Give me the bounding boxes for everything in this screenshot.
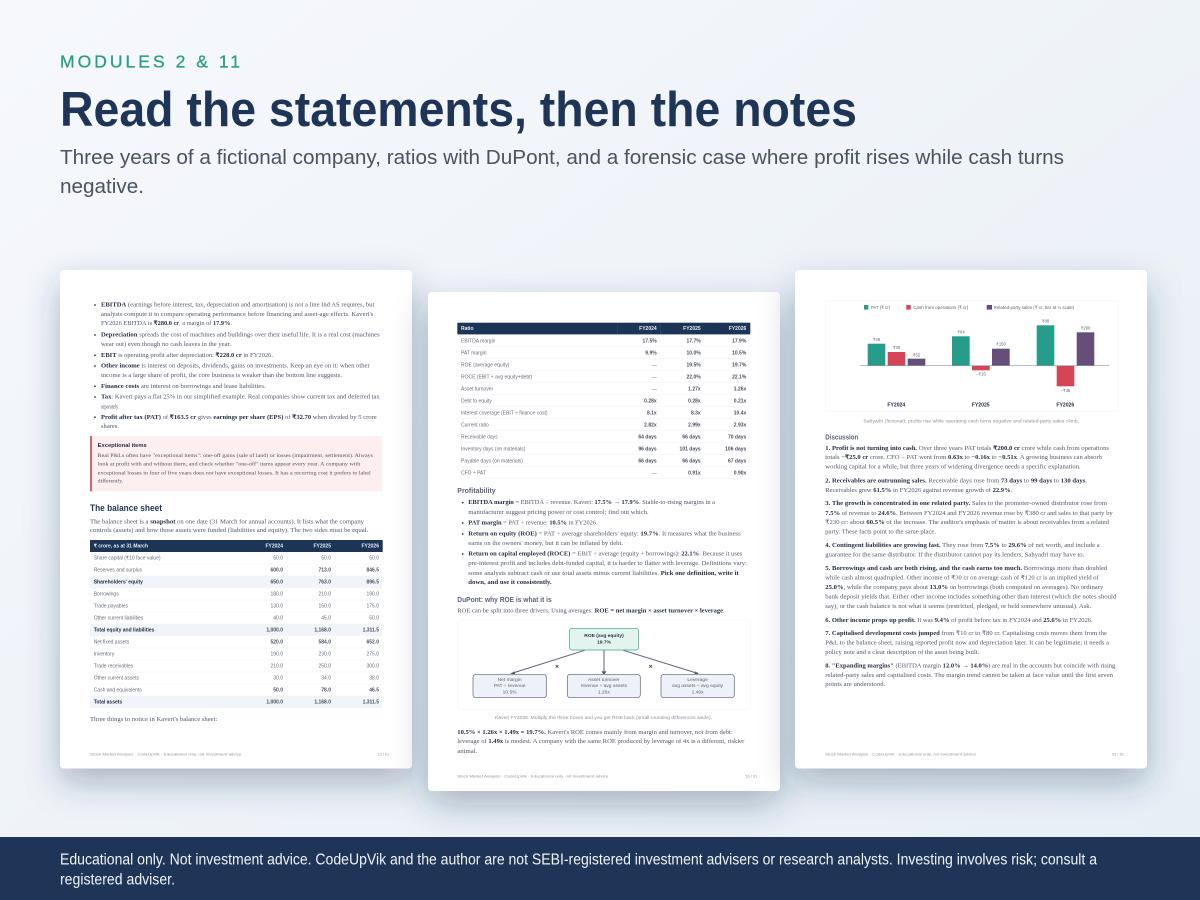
table: balance sheet: 1,168.0 xyxy=(314,700,331,706)
bullet list: P&L terms: FY2026 EBITDA is ₹280.0 cr, a margin of 17.9%. xyxy=(101,320,232,327)
table: balance sheet: Inventory xyxy=(94,652,115,658)
text: discussion points: 5. Borrowings and cash are both rising, and the cash earns too much. Borrowings more than doubled xyxy=(825,566,1107,572)
table: balance sheet: 300.0 xyxy=(366,664,379,670)
bullet list: P&L terms: Other income is interest on deposits, dividends, gains on investments. Keep an eye on it: when other xyxy=(101,364,370,370)
text: balance sheet intro: The balance sheet is a snapshot on one date (31 March for annual accounts). It lists what the company xyxy=(90,518,365,526)
page footer xyxy=(90,751,389,756)
table: balance sheet: 846.5 xyxy=(366,568,379,574)
diagram: DuPont tree xyxy=(458,620,751,709)
title: Read the statements, then the notes xyxy=(60,83,857,137)
table: ratios: 0.91x xyxy=(688,470,701,476)
bullet list: P&L terms: shares. xyxy=(101,424,119,430)
legend: Cash from operations (₹ cr) xyxy=(913,305,969,310)
year labels xyxy=(887,402,1074,408)
text: discussion points: bank deposit yields that. Either other income includes something other than interest (which the notes should xyxy=(825,594,1116,600)
table: balance sheet: 34.0 xyxy=(321,676,331,682)
panel: page 16, ratios and DuPont xyxy=(428,292,780,791)
table: balance sheet: 30.0 xyxy=(273,676,283,682)
table: ratios: 96 days xyxy=(638,446,657,452)
table: balance sheet: 230.0 xyxy=(318,652,331,658)
text: discussion points: 7. Capitalised development costs jumped from ₹10 cr to ₹80 cr. Capitalising costs moves them from the xyxy=(825,630,1107,637)
node: ROE: ROE (avg equity) xyxy=(584,633,624,639)
text: balance sheet intro: controls (assets) and how those assets were funded (liabilities and equity). The two sides must be equal. xyxy=(90,527,369,534)
bar value labels: ₹150 xyxy=(996,342,1006,347)
text: discussion points: 8. "Expanding margins" (EBITDA margin 12.0% → 14.0% ) are real in the accounts but coincide with rising xyxy=(825,662,1115,670)
bullet list: P&L terms: EBIT is operating profit after depreciation: ₹228.0 cr in FY2026. xyxy=(101,352,273,359)
bullet list: P&L terms: EBITDA (earnings before interest, tax, depreciation and amortisation) is not a line Ind AS requires, but xyxy=(101,302,375,308)
text: discussion points: party. These facts point to the same place. xyxy=(825,528,937,536)
table: balance sheet: 1,000.0 xyxy=(266,700,283,706)
table: balance sheet: 190.0 xyxy=(366,592,379,598)
table: balance sheet: FY2024 xyxy=(265,544,283,550)
node: net margin: Net margin xyxy=(498,677,522,683)
table: balance sheet: 713.0 xyxy=(318,568,331,574)
subtitle: Three years of a fictional company, ratios with DuPont, and a forensic case where profit rises while cash turns xyxy=(60,146,1064,169)
node: net margin xyxy=(473,674,546,698)
table: balance sheet: Trade receivables xyxy=(94,664,134,670)
table: ratios: 2.82x xyxy=(644,422,657,428)
table: ratios: Ratio xyxy=(461,326,474,332)
table: balance sheet: 190.0 xyxy=(270,652,283,658)
table: ratios: 0.90x xyxy=(734,470,747,476)
table: ratios: Asset turnover xyxy=(461,386,494,392)
table: balance sheet: 210.0 xyxy=(318,592,331,598)
table: ratios: ROCE (EBIT ÷ avg equity+debt) xyxy=(461,374,532,380)
table: ratios: 66 days xyxy=(682,434,701,440)
table: balance sheet: 650.0 xyxy=(270,580,283,586)
panel: page 53, forensic case xyxy=(795,270,1147,768)
table: balance sheet: 250.0 xyxy=(318,664,331,670)
table: ratios xyxy=(457,323,750,479)
caption: chart: Sahyadri (fictional): profits rise while operating cash turns negative and related-party sales climb. xyxy=(863,419,1079,424)
bullet list: P&L terms: wear out) even though no cash leaves in the year. xyxy=(101,341,232,348)
table: ratios: 10.4x xyxy=(734,410,747,416)
bars xyxy=(868,325,1094,386)
bullet list: P&L terms xyxy=(94,302,380,430)
table: balance sheet: Trade payables xyxy=(94,604,128,610)
table: ratios: Debt to equity xyxy=(461,398,492,404)
table: balance sheet: Reserves and surplus xyxy=(94,568,143,574)
table: balance sheet: 1,311.5 xyxy=(363,628,379,634)
text: DuPont worked example: animal. xyxy=(457,749,478,755)
year labels: FY2024 xyxy=(887,402,905,408)
text: discussion points: Receivables grew 61.5% in FY2026 against revenue growth of 22.9%. xyxy=(825,487,1013,494)
bullet list: profitability ratios: earns on the owners' money, but it can be inflated by debt. xyxy=(468,540,624,547)
year labels: FY2026 xyxy=(1056,402,1074,408)
text: discussion points: P&L to the balance sheet, raising reported profit now and depreciation later. It can be legitimate; it needs a xyxy=(825,640,1109,646)
table: ratios: 0.28x xyxy=(688,398,701,404)
callout: exceptional items: Real P&Ls often have "exceptional items": one-off gains (sale of land) or losses (impairment, settlement). Always xyxy=(98,452,373,459)
text: discussion points: 1. Profit is not turning into cash. Over three years PAT totals ₹200.0 cr crore while cash from operations xyxy=(825,445,1110,452)
text: discussion points: policy note and a clear description of the asset being built. xyxy=(825,649,980,656)
legend xyxy=(864,305,1075,310)
text: discussion points: 2. Receivables are outrunning sales. Receivable days rose from 73 days to 99 days to 130 days . xyxy=(825,478,1088,484)
node: asset turnover xyxy=(567,674,640,698)
table: ratios: 17.5% xyxy=(643,338,657,344)
text: discussion points xyxy=(825,445,1116,688)
heading: discussion: Discussion xyxy=(825,434,858,442)
page footer xyxy=(825,751,1124,756)
table: balance sheet: FY2026 xyxy=(361,544,379,550)
table: balance sheet: Total equity and liabilities xyxy=(94,628,155,634)
table: ratios: Receivable days xyxy=(461,434,498,440)
bullet list: P&L terms: analysts compute it to compare operating performance before financing and asset-age effects. Kaveri's xyxy=(101,311,374,318)
table: balance sheet: 50.0 xyxy=(321,556,331,562)
table: ratios: 2.93x xyxy=(734,422,747,428)
eyebrow: modules: MODULES 2 & 11 xyxy=(60,52,240,72)
table: balance sheet: 38.0 xyxy=(369,676,379,682)
table: balance sheet: 50.0 xyxy=(369,616,379,622)
table: ratios: Payable days (on materials) xyxy=(461,458,523,464)
bullet list: profitability ratios: EBITDA margin = EBITDA ÷ revenue. Kaveri: 17.5% → 17.9% . Stable-to-rising margins in a xyxy=(468,500,715,506)
text: discussion points: while cash almost quadrupled. Other income of ₹30 cr on average cash of ₹120 cr is an implied yield of xyxy=(825,574,1100,582)
bullet list: profitability ratios xyxy=(462,500,747,586)
table: balance sheet: 150.0 xyxy=(318,604,331,610)
table: ratios: 8.3x xyxy=(691,410,701,416)
node: leverage: avg assets ÷ avg equity xyxy=(672,683,724,689)
table: ratios: 101 days xyxy=(680,446,701,452)
text: discussion points: totals −₹25.0 cr crore. CFO ÷ PAT went from 0.63x to −0.16x to −0.51x. A growing business can absorb xyxy=(825,454,1102,461)
table: balance sheet: FY2025 xyxy=(313,544,331,550)
page footer: Stock Market Analysis · CodeUpVik · Educational only, not investment advice xyxy=(90,751,241,756)
table: balance sheet: 1,311.5 xyxy=(363,700,379,706)
footer band: disclaimer: Educational only. Not investment advice. CodeUpVik and the author are not SEBI-registered investment advisers or research analysts. Investing involves risk; consult a xyxy=(60,852,1097,868)
node: asset turnover: 1.26x xyxy=(598,689,610,695)
table: balance sheet: 600.0 xyxy=(270,568,283,574)
table: ratios: 19.5% xyxy=(687,362,701,368)
text: discussion points: points are understood. xyxy=(825,682,886,688)
bullet list: profitability ratios: manufacturer suggest pricing power or cost control; find out which. xyxy=(468,509,649,516)
table: ratios: Current ratio xyxy=(461,422,489,428)
table: ratios: 22.1% xyxy=(732,374,747,380)
bullet list: profitability ratios: Return on equity (ROE) = PAT ÷ average shareholders' equity: 19.7%. It measures what the business xyxy=(468,530,741,538)
table: ratios: 17.7% xyxy=(687,338,701,344)
table: ratios: 0.21x xyxy=(734,398,747,404)
subtitle: negative. xyxy=(60,175,144,198)
caption: DuPont: Kaveri FY2026. Multiply the three boxes and you get ROE back (small rounding differences aside). xyxy=(495,715,712,720)
subtitle xyxy=(60,146,1064,198)
text: discussion points: guarantee for the same distributor. If the distributor cannot pay its lenders, Sahyadri may have to. xyxy=(825,552,1085,558)
table: ratios: FY2026 xyxy=(729,326,747,332)
node: net margin: PAT ÷ revenue xyxy=(494,683,526,689)
table: ratios: 66 days xyxy=(682,458,701,464)
text: discussion points: 3. The growth is concentrated in one related party. Sales to the promoter-owned distributor rose from xyxy=(825,500,1107,507)
page footer: Stock Market Analysis · CodeUpVik · Educational only, not investment advice xyxy=(825,751,976,756)
page footer: 53 / 61 xyxy=(1112,751,1124,756)
table: balance sheet: 46.5 xyxy=(369,688,379,694)
heading: profitability: Profitability xyxy=(457,488,496,495)
bullet list: P&L terms: Profit after tax (PAT) of ₹163.5 cr gives earnings per share (EPS) of ₹32.70 when divided by 5 crore xyxy=(101,414,377,421)
text: three things: Three things to notice in Kaveri's balance sheet: xyxy=(90,717,218,723)
bar value labels: ₹48 xyxy=(873,337,881,342)
table: ratios: — xyxy=(652,386,657,392)
table: ratios: — xyxy=(652,470,657,476)
table: ratios: 1.26x xyxy=(734,386,747,392)
table: ratios: 17.9% xyxy=(732,338,747,344)
text: discussion points: 25.0% , while the company pays about 13.0% on borrowings (both computed on averages). No ordinary xyxy=(825,584,1104,591)
table: balance sheet: 175.0 xyxy=(366,604,379,610)
table: ratios: 2.99x xyxy=(688,422,701,428)
table: balance sheet: 78.0 xyxy=(321,688,331,694)
text: discussion points: 6. Other income props up profit. It was 9.4% of profit before tax in FY2024 and 25.6% in FY2026. xyxy=(825,617,1093,624)
table: ratios: EBITDA margin xyxy=(461,338,496,344)
arrows xyxy=(511,650,698,674)
node: asset turnover: Asset turnover xyxy=(588,677,620,683)
text: discussion points: 7.5% of revenue to 24.6%. Between FY2024 and FY2026 revenue rose by ₹380 cr and sales to that party by xyxy=(825,510,1114,517)
table: balance sheet: 763.0 xyxy=(318,580,331,586)
bullet list: profitability ratios: some analysts subtract cash or use total assets minus current liabilities. Pick one definition, write it xyxy=(468,571,739,577)
bar value labels: ₹88 xyxy=(1042,318,1050,323)
table: ratios: 19.7% xyxy=(732,362,747,368)
node: leverage: Leverage xyxy=(687,677,708,683)
table: ratios: 70 days xyxy=(728,434,747,440)
callout: exceptional items: Exceptional items xyxy=(98,443,147,449)
text: balance sheet intro xyxy=(90,518,369,534)
table: balance sheet xyxy=(90,540,383,708)
text: DuPont worked example xyxy=(457,729,744,755)
table: ratios: 66 days xyxy=(638,458,657,464)
text: DuPont intro: ROE can be split into three drivers. Using averages: ROE = net margin × asset turnover × leverage . xyxy=(457,608,725,614)
table: ratios: FY2024 xyxy=(639,326,657,332)
page footer: 13 / 61 xyxy=(377,751,389,756)
table: balance sheet: Total assets xyxy=(94,700,122,706)
table: ratios: — xyxy=(652,362,657,368)
node: leverage: 1.49x xyxy=(692,689,704,695)
bullet list: P&L terms: income is a large share of profit, the core business is weaker than the bottom line suggests. xyxy=(101,372,343,379)
table: ratios: 1.27x xyxy=(688,386,701,392)
table: balance sheet: Share capital (₹10 face value) xyxy=(94,556,161,562)
table: balance sheet: Borrowings xyxy=(94,592,119,598)
node: leverage xyxy=(661,674,734,698)
table: ratios: 8.1x xyxy=(647,410,657,416)
bar value labels: ₹290 xyxy=(1081,326,1091,331)
table: balance sheet: 275.0 xyxy=(366,652,379,658)
table: balance sheet: 896.5 xyxy=(366,580,379,586)
bar value labels: −₹10 xyxy=(976,372,987,377)
footer band: disclaimer xyxy=(0,837,1200,900)
table: balance sheet: 520.0 xyxy=(270,640,283,646)
chart: PAT, cash from operations and related-party sales xyxy=(826,301,1118,412)
table: ratios: 106 days xyxy=(725,446,747,452)
page footer: 16 / 61 xyxy=(745,774,757,779)
table: ratios: 0.28x xyxy=(644,398,657,404)
table: balance sheet: 50.0 xyxy=(369,556,379,562)
node: asset turnover: revenue ÷ avg assets xyxy=(581,683,628,689)
table: ratios: 10.5% xyxy=(732,350,747,356)
table: ratios: PAT margin xyxy=(461,350,487,356)
table: balance sheet: 40.0 xyxy=(273,616,283,622)
bullet list: profitability ratios: PAT margin = PAT ÷ revenue: 10.5% in FY2026. xyxy=(468,520,598,526)
bullet list: P&L terms: Finance costs are interest on borrowings and lease liabilities. xyxy=(101,384,266,390)
node: net margin: 10.5% xyxy=(503,689,517,695)
table: balance sheet: Cash and equivalents xyxy=(94,688,142,694)
bar value labels: ₹52 xyxy=(913,352,921,357)
table: balance sheet: 50.0 xyxy=(273,688,283,694)
multiply signs: × xyxy=(555,664,559,670)
table: ratios: CFO ÷ PAT xyxy=(461,470,486,476)
table: balance sheet: Net fixed assets xyxy=(94,640,130,646)
table: balance sheet: 1,000.0 xyxy=(266,628,283,634)
table: balance sheet: 584.0 xyxy=(318,640,331,646)
heading: DuPont: DuPont: why ROE is what it is xyxy=(457,597,552,604)
bullet list: P&L terms: Depreciation spreads the cost of machines and buildings over their useful life. It is a real cost (machines xyxy=(101,332,380,338)
table: ratios: 67 days xyxy=(728,458,747,464)
table: balance sheet: 180.0 xyxy=(270,592,283,598)
table: balance sheet: 210.0 xyxy=(270,664,283,670)
table: ratios: Interest coverage (EBIT ÷ finance cost) xyxy=(461,410,548,416)
callout: exceptional items: differently. xyxy=(98,478,124,485)
table: balance sheet: Shareholders' equity xyxy=(94,580,143,586)
text: discussion points: working capital for a while, but three years of widening divergence needs a specific explanation. xyxy=(825,464,1081,470)
table: balance sheet: Other current liabilities xyxy=(94,616,144,622)
multiply signs xyxy=(555,664,653,670)
text: discussion points: related-party sales and capitalised costs. The margin trend cannot be taken at face value until the first seven xyxy=(825,672,1113,679)
bullet list: profitability ratios: down, and use it consistently. xyxy=(468,580,552,586)
text: discussion points: 4. Contingent liabilities are growing fast. They rose from 7.5% to 29.6% of net worth, and include a xyxy=(825,542,1100,549)
node: ROE: 19.7% xyxy=(597,640,612,646)
node: ROE xyxy=(569,628,639,650)
table: ratios: Inventory days (on materials) xyxy=(461,446,526,452)
legend: Related-party sales (₹ cr, bar at ¼ scale) xyxy=(994,305,1075,310)
bar value labels xyxy=(873,318,1091,393)
footer band: disclaimer: registered adviser. xyxy=(60,872,175,888)
table: balance sheet: ₹ crore, as at 31 March xyxy=(94,544,148,550)
table: ratios: FY2025 xyxy=(683,326,701,332)
table: ratios: — xyxy=(652,374,657,380)
bar value labels: −₹45 xyxy=(1061,388,1071,393)
table: ratios: 10.0% xyxy=(687,350,701,356)
text: DuPont worked example: leverage of 1.49x is modest. A company with the same ROE produced by leverage of 4x is a different, riskier xyxy=(457,738,744,745)
table: ratios: 64 days xyxy=(638,434,657,440)
year labels: FY2025 xyxy=(972,402,990,408)
table: balance sheet: 130.0 xyxy=(270,604,283,610)
bullet list: P&L terms: separately. xyxy=(101,404,119,410)
table: ratios: ROE (average equity) xyxy=(461,362,510,368)
table: balance sheet: 45.0 xyxy=(321,616,331,622)
page footer xyxy=(457,774,757,779)
callout: exceptional items: exceptional losses in four of five years does not have exceptional losses. It has a recurring cost it prefers to label xyxy=(98,469,371,476)
callout: exceptional items: look at profit with and without them, and check whether "one-off" items appear every year. A company with xyxy=(98,461,361,468)
text: discussion points: say), or the cash balance is not what it seems (restricted, pledged, or held somewhere unusual). Ask. xyxy=(825,603,1092,610)
bar value labels: ₹64 xyxy=(957,330,965,335)
bullet list: P&L terms: Tax: Kaveri pays a flat 25% in our simplified example. Real companies show current tax and deferred tax xyxy=(101,394,380,400)
table: ratios: 22.0% xyxy=(687,374,701,380)
table: ratios: 9.9% xyxy=(645,350,657,356)
text: DuPont worked example: 10.5% × 1.26x × 1.49x = 19.7%. Kaveri's ROE comes mainly from margin and turnover, not from debt: xyxy=(457,729,733,736)
bar value labels: ₹30 xyxy=(893,345,901,350)
table: balance sheet: 50.0 xyxy=(273,556,283,562)
table: balance sheet: 1,168.0 xyxy=(314,628,331,634)
page footer: Stock Market Analysis · CodeUpVik · Educational only, not investment advice xyxy=(457,774,608,779)
table: balance sheet: 652.0 xyxy=(366,640,379,646)
panel: page 13, P&L notes and balance sheet xyxy=(60,270,412,768)
callout: exceptional items xyxy=(90,436,382,491)
table: balance sheet: Other current assets xyxy=(94,676,139,682)
bullet list: profitability ratios: Return on capital employed (ROCE) = EBIT ÷ average (equity + borrowings): 22.1%. Because it uses xyxy=(468,550,743,558)
multiply signs: × xyxy=(649,664,653,670)
legend: PAT (₹ cr) xyxy=(871,305,891,310)
bullet list: profitability ratios: pre-interest profit and includes debt-funded capital, it is harder to flatter with leverage. Definitions vary: xyxy=(468,560,747,567)
heading: the balance sheet: The balance sheet xyxy=(90,503,162,513)
text: discussion points: ₹230 cr: about 60.5% of the increase. The auditor's emphasis of matter is about receivables from a related xyxy=(825,519,1109,526)
